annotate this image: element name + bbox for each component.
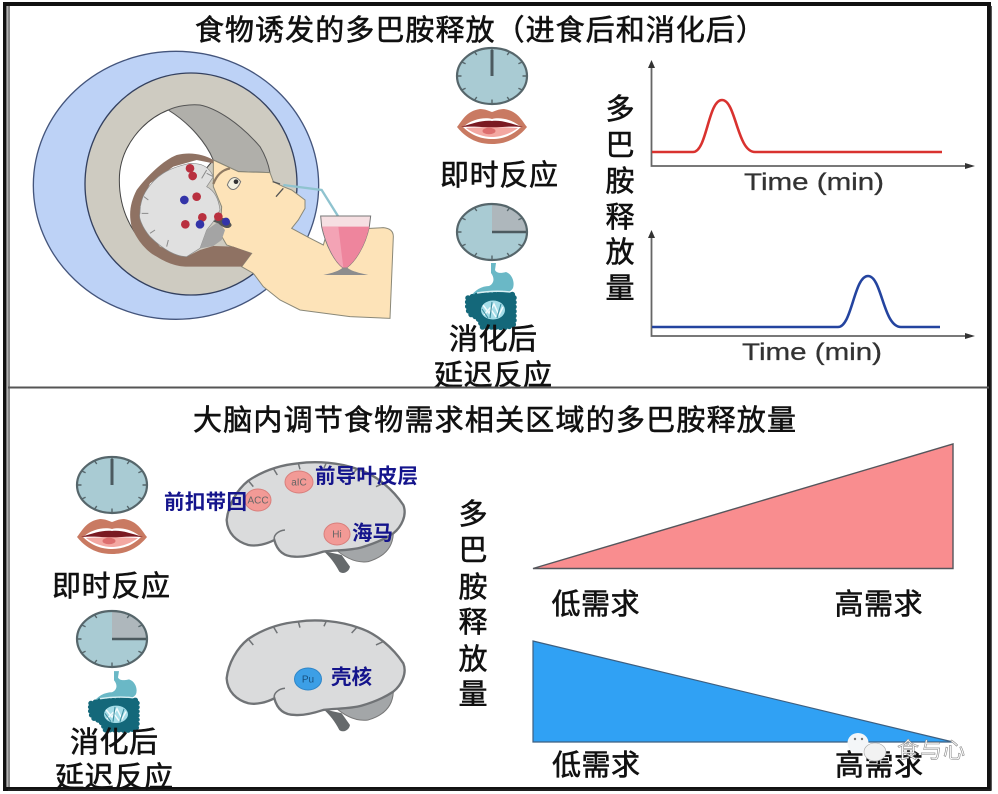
region: aIC: aIC	[291, 478, 307, 488]
region: Hi: Hi	[332, 530, 342, 540]
axis label: dopamine release, top: 胺	[605, 165, 635, 198]
label: delayed response after digestion: 消化后	[70, 726, 158, 759]
icon: clock at zero minutes	[77, 457, 147, 513]
axis label: dopamine release, top: 释	[605, 201, 635, 234]
scanner rings	[33, 51, 319, 319]
icon: stomach and intestine	[468, 263, 514, 328]
axis label: dopamine release, bottom: 多	[458, 498, 488, 531]
axis label: dopamine release, top: 量	[605, 273, 635, 305]
title: bottom panel: 大脑内调节食物需求相关区域的多巴胺释放量	[193, 404, 796, 437]
brain: lower with putamen	[227, 620, 405, 731]
brain with dopamine dots	[140, 163, 232, 257]
brain: upper with pink regions	[164, 462, 418, 573]
label: high demand: 高需求	[835, 749, 923, 782]
watermark: wechat account: 食与心	[897, 738, 965, 763]
region: ACC: ACC	[247, 496, 269, 506]
axis label: dopamine release, top: 多	[605, 93, 635, 126]
label: delayed response after digestion: 消化后	[449, 323, 537, 356]
label: hippocampus: 海马	[352, 522, 393, 545]
label: immediate response: 即时反应	[52, 570, 170, 603]
icon: clock at zero minutes	[457, 48, 527, 104]
icon: clock quarter hour	[77, 611, 147, 667]
icon: lips	[457, 109, 527, 144]
straw	[283, 185, 338, 217]
label: delayed response after digestion	[434, 323, 552, 392]
label: anterior insula: 前导叶皮层	[315, 465, 418, 488]
axis label: dopamine release, bottom: 胺	[458, 571, 488, 604]
glass of pink drink	[321, 216, 371, 275]
panel: food-induced dopamine release	[33, 14, 975, 392]
chart: delayed dopamine curve: Time (min)	[742, 339, 882, 366]
label: delayed response after digestion: 延迟反应	[434, 359, 552, 392]
mouth and nose lines	[273, 182, 283, 197]
watermark: wechat account	[848, 733, 965, 763]
chart: immediate dopamine curve: Time (min)	[744, 169, 884, 196]
label: high demand: 高需求	[834, 588, 922, 621]
axis label: dopamine release, top: 巴	[605, 130, 635, 162]
region: Pu	[294, 668, 322, 690]
region: aIC	[285, 471, 313, 493]
axis label: dopamine release, bottom: 释	[458, 606, 488, 639]
label: anterior cingulate: 前扣带回	[164, 491, 247, 514]
hair	[130, 153, 252, 267]
region: ACC	[245, 489, 271, 511]
chart: delayed dopamine curve	[648, 230, 975, 366]
person: face, neck and shoulder	[213, 160, 393, 318]
axis label: dopamine release, bottom: 放	[458, 643, 488, 676]
label: immediate response: 即时反应	[440, 159, 558, 192]
illustration: person in scanner drinking	[33, 51, 393, 319]
icon: clock quarter hour	[457, 204, 527, 260]
title: top panel: 食物诱发的多巴胺释放（进食后和消化后）	[195, 14, 765, 47]
label: delayed response after digestion	[55, 726, 173, 794]
chart: falling blue wedge	[533, 641, 953, 742]
axis label: dopamine release, top	[605, 93, 635, 305]
label: low demand: 低需求	[552, 749, 640, 782]
eye	[213, 168, 241, 190]
chart: immediate dopamine curve	[648, 60, 975, 196]
region: Hi	[324, 523, 350, 545]
axis label: dopamine release, top: 放	[605, 236, 635, 269]
icon: stomach and intestine	[91, 671, 137, 730]
panel: dopamine release in brain regions	[52, 404, 965, 794]
chart: rising pink wedge	[533, 444, 953, 568]
label: putamen: 壳核	[331, 665, 372, 689]
axis label: dopamine release, bottom	[458, 498, 488, 711]
axis label: dopamine release, bottom: 量	[458, 679, 488, 711]
icon: lips	[77, 519, 147, 554]
label: delayed response after digestion: 延迟反应	[55, 761, 173, 794]
label: low demand: 低需求	[552, 588, 640, 621]
region: Pu: Pu	[302, 674, 314, 686]
axis label: dopamine release, bottom: 巴	[458, 535, 488, 567]
